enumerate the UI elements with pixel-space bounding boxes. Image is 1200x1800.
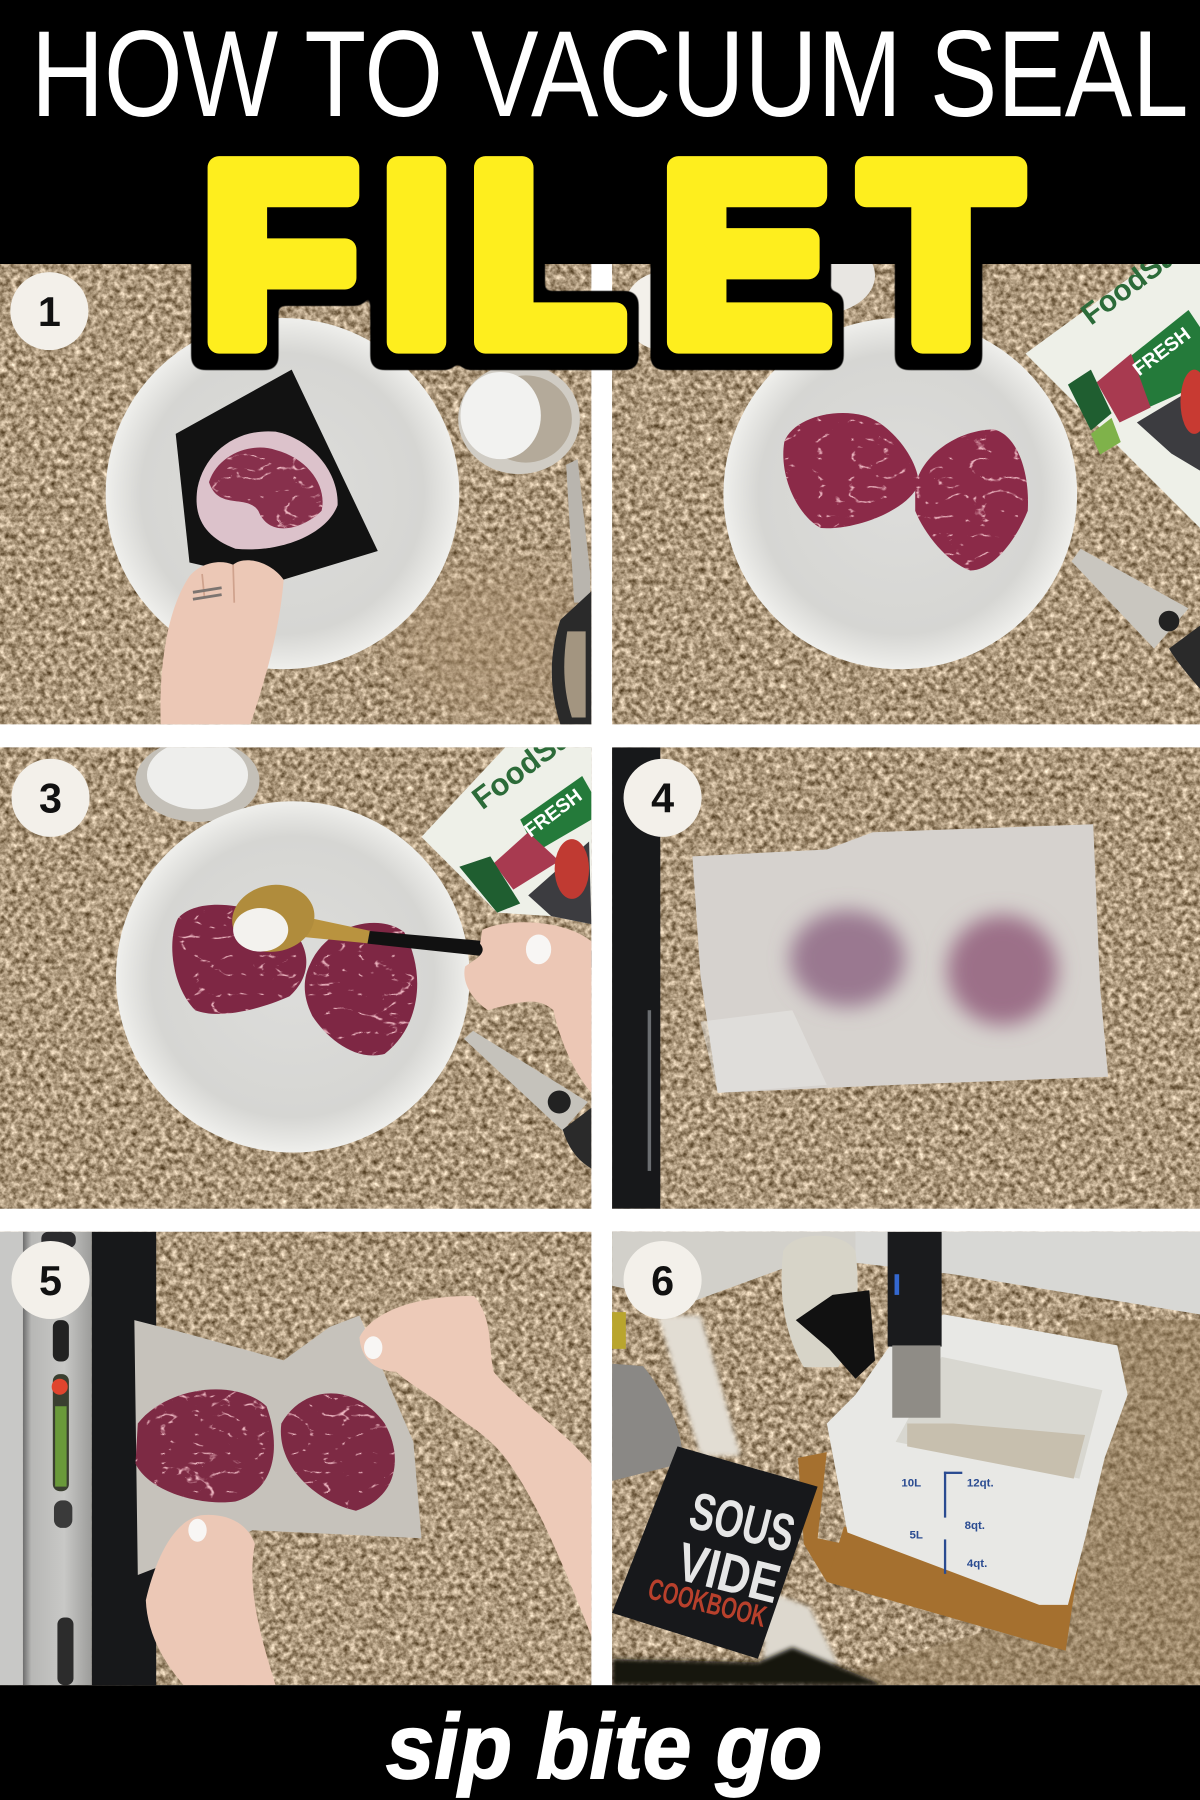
black gloves xyxy=(796,1290,875,1379)
water container: 8qt. xyxy=(965,1520,985,1532)
step badge 5 xyxy=(11,1241,90,1319)
ribbed vase xyxy=(782,1236,858,1367)
FoodSaver box xyxy=(422,747,592,924)
sous vide cookbook: VIDE xyxy=(671,1532,786,1616)
step badge 6 xyxy=(624,1241,702,1319)
step badge 5: 5 xyxy=(39,1258,62,1304)
vacuum sealer edge xyxy=(612,747,660,1209)
immersion circulator xyxy=(888,1232,942,1418)
black package with filet xyxy=(176,370,378,582)
hand xyxy=(160,560,284,724)
sous vide cookbook: COOKBOOK xyxy=(645,1572,770,1634)
step badge 1 xyxy=(10,272,88,350)
step badge 3: 3 xyxy=(39,776,62,822)
panel: step 5 xyxy=(0,1232,591,1685)
water container xyxy=(827,1314,1128,1605)
vacuum sealer machine xyxy=(0,1232,156,1685)
sous vide cookbook xyxy=(612,1446,818,1659)
plate xyxy=(116,801,470,1153)
bag xyxy=(134,1316,421,1575)
sink xyxy=(612,1364,682,1481)
water container: 12qt. xyxy=(967,1478,994,1490)
wall and window xyxy=(612,1232,1200,1314)
FoodSaver box: FRESH xyxy=(1129,323,1195,381)
gold spoon with salt xyxy=(227,878,591,968)
scissors xyxy=(552,459,591,724)
dark shadow xyxy=(612,1647,884,1685)
counter glare xyxy=(764,1590,838,1665)
footer brand: sip bite go: sip bite go xyxy=(386,1696,822,1798)
FoodSaver box: FoodSaver xyxy=(465,692,614,816)
cutting board xyxy=(798,1452,1083,1651)
lower hand xyxy=(146,1515,276,1685)
step badge 3 xyxy=(11,759,90,837)
scissors xyxy=(1071,549,1200,689)
panel: step 6 xyxy=(612,1232,1200,1685)
salt bowl xyxy=(830,264,875,310)
filets xyxy=(783,413,1028,571)
salt bowl xyxy=(136,739,260,822)
water container: 10L xyxy=(901,1478,921,1490)
filets xyxy=(136,1389,395,1511)
scissors xyxy=(464,1031,591,1169)
counter reflection xyxy=(658,1316,741,1456)
step badge 4 xyxy=(624,759,702,837)
yellow sponge xyxy=(612,1312,626,1349)
title highlight: FILET: FILET xyxy=(202,112,1019,396)
right counter tone xyxy=(804,1320,1200,1685)
top title band xyxy=(0,0,1200,264)
step badge 6: 6 xyxy=(651,1258,674,1304)
filets xyxy=(172,905,417,1055)
step badge 1: 1 xyxy=(38,289,61,335)
plate xyxy=(106,318,459,669)
upper hand and arm xyxy=(359,1296,591,1636)
water container: 4qt. xyxy=(967,1558,987,1570)
panel: step 3 xyxy=(0,747,592,1209)
salt bowl xyxy=(458,364,580,474)
panel: step 1 xyxy=(0,264,597,724)
FoodSaver box: FRESH xyxy=(520,785,586,842)
panel: step 2 xyxy=(612,264,1200,724)
panel: step 4 xyxy=(612,747,1200,1209)
FoodSaver box xyxy=(1026,264,1200,528)
plate xyxy=(723,318,1077,669)
footer band xyxy=(0,1685,1200,1800)
fingernail xyxy=(526,934,551,964)
sous vide cookbook: SOUS xyxy=(684,1480,801,1563)
step badge 4: 4 xyxy=(651,776,674,822)
water container: 5L xyxy=(909,1529,923,1541)
step badge 2 xyxy=(628,274,651,348)
clear bag with filets xyxy=(692,824,1108,1093)
hand xyxy=(464,922,591,1093)
step badge 2: 2 xyxy=(651,289,674,335)
